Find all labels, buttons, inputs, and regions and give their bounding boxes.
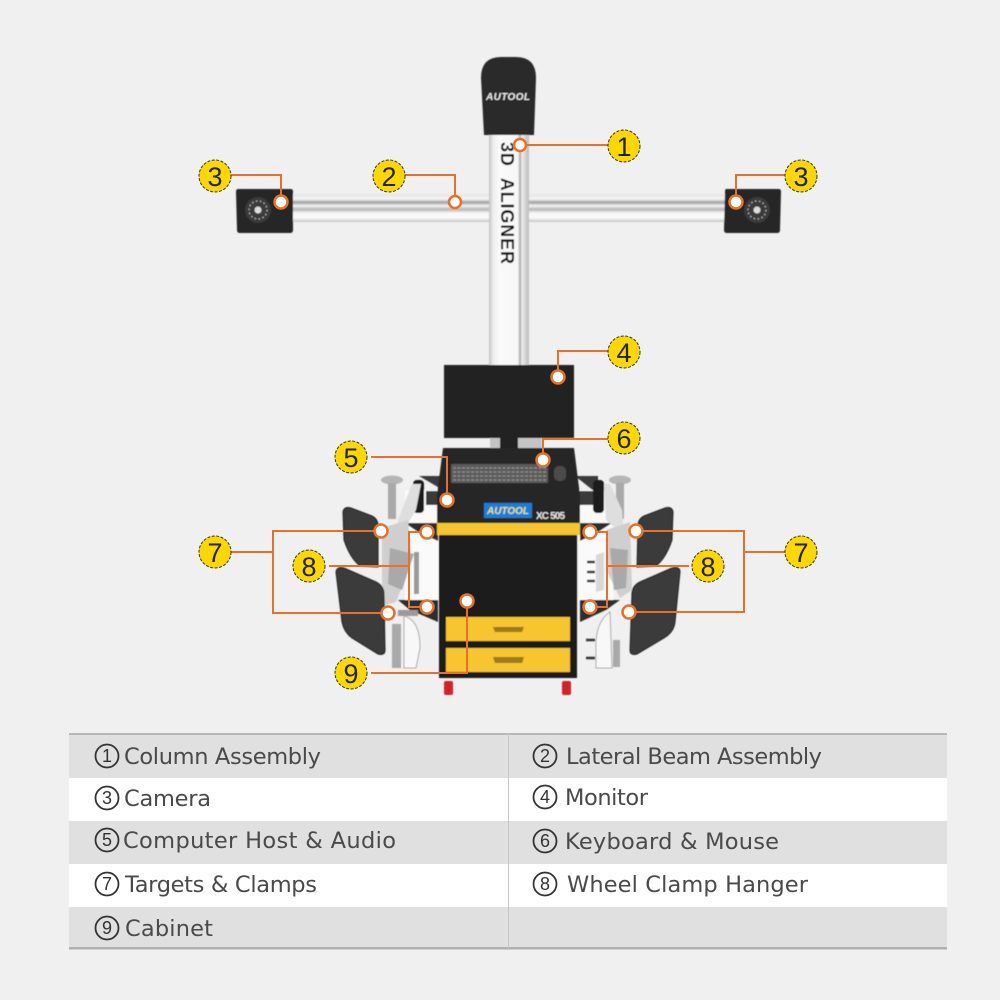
right caster: [562, 681, 571, 695]
callout 6: 6: [616, 424, 632, 454]
left camera: [236, 189, 293, 233]
legend item 8: 8: [540, 874, 550, 894]
legend item 8: Wheel Clamp Hanger: [567, 872, 809, 898]
cabinet logo: AUTOOL: [486, 506, 529, 517]
callout 8 right: 8: [700, 552, 716, 582]
callout 3 left: [199, 160, 288, 208]
monitor: [444, 365, 574, 448]
cabinet logo: [484, 503, 532, 518]
callout 8 left: [293, 526, 434, 614]
legend item 9: Cabinet: [125, 916, 213, 942]
legend item 3: 3: [102, 788, 112, 808]
legend item 4: 4: [540, 787, 550, 807]
legend item 7: 7: [102, 874, 112, 894]
callout 2: [373, 160, 461, 208]
upper drawer: [446, 617, 570, 641]
legend item 5: Computer Host & Audio: [123, 828, 396, 854]
yellow band: [437, 523, 580, 535]
legend item 2: 2: [540, 746, 550, 766]
column assembly: [489, 130, 529, 370]
callout 3 right: [730, 160, 817, 208]
legend item 7: Targets & Clamps: [124, 872, 317, 898]
callout 1: 1: [616, 132, 632, 162]
model label: XC 505: [536, 511, 565, 522]
callout 5: [335, 441, 454, 506]
cabinet: [437, 448, 580, 695]
legend item 4: Monitor: [565, 785, 649, 811]
legend item 5: 5: [102, 830, 112, 850]
left upper target: [343, 508, 378, 567]
right clamp area: [575, 476, 632, 668]
callout 6: [536, 422, 640, 466]
legend item 6: Keyboard & Mouse: [565, 829, 779, 855]
head logo: AUTOOL: [485, 92, 530, 103]
mouse: [554, 466, 566, 481]
callout 4: 4: [616, 338, 632, 368]
right camera: [724, 189, 781, 233]
callout 7 left: 7: [207, 538, 223, 568]
callout 5: 5: [343, 443, 359, 473]
legend item 1: 1: [102, 746, 112, 766]
callout 4: [552, 336, 640, 384]
right upper target: [637, 508, 673, 567]
keyboard: [451, 464, 548, 483]
column lettering: 3D ALIGNER: [497, 142, 517, 264]
callout 7 right: 7: [793, 538, 809, 568]
callout 8 left: 8: [301, 552, 317, 582]
legend item 2: Lateral Beam Assembly: [566, 744, 822, 770]
left caster: [444, 681, 453, 695]
callout 2: 2: [381, 162, 397, 192]
legend item 1: Column Assembly: [124, 744, 321, 770]
legend item 6: 6: [540, 831, 550, 851]
callout 1: [514, 130, 640, 162]
callout 3 left: 3: [207, 162, 223, 192]
callout 8 right: [584, 526, 724, 614]
column head cap: [481, 57, 536, 135]
legend table: [69, 733, 947, 950]
callout 9: 9: [343, 659, 359, 689]
callout 7 right: [622, 524, 817, 618]
aligner machine illustration: [236, 57, 781, 695]
callout 9: [335, 594, 474, 689]
left lower target: [336, 568, 385, 654]
right lower target: [630, 568, 680, 654]
callout 7 left: [199, 524, 394, 620]
callout 3 right: 3: [793, 162, 809, 192]
lateral beam assembly: [292, 194, 726, 222]
left clamp area: [381, 476, 443, 668]
legend item 3: Camera: [124, 786, 211, 812]
lower drawer: [446, 648, 570, 672]
legend item 9: 9: [102, 918, 112, 938]
